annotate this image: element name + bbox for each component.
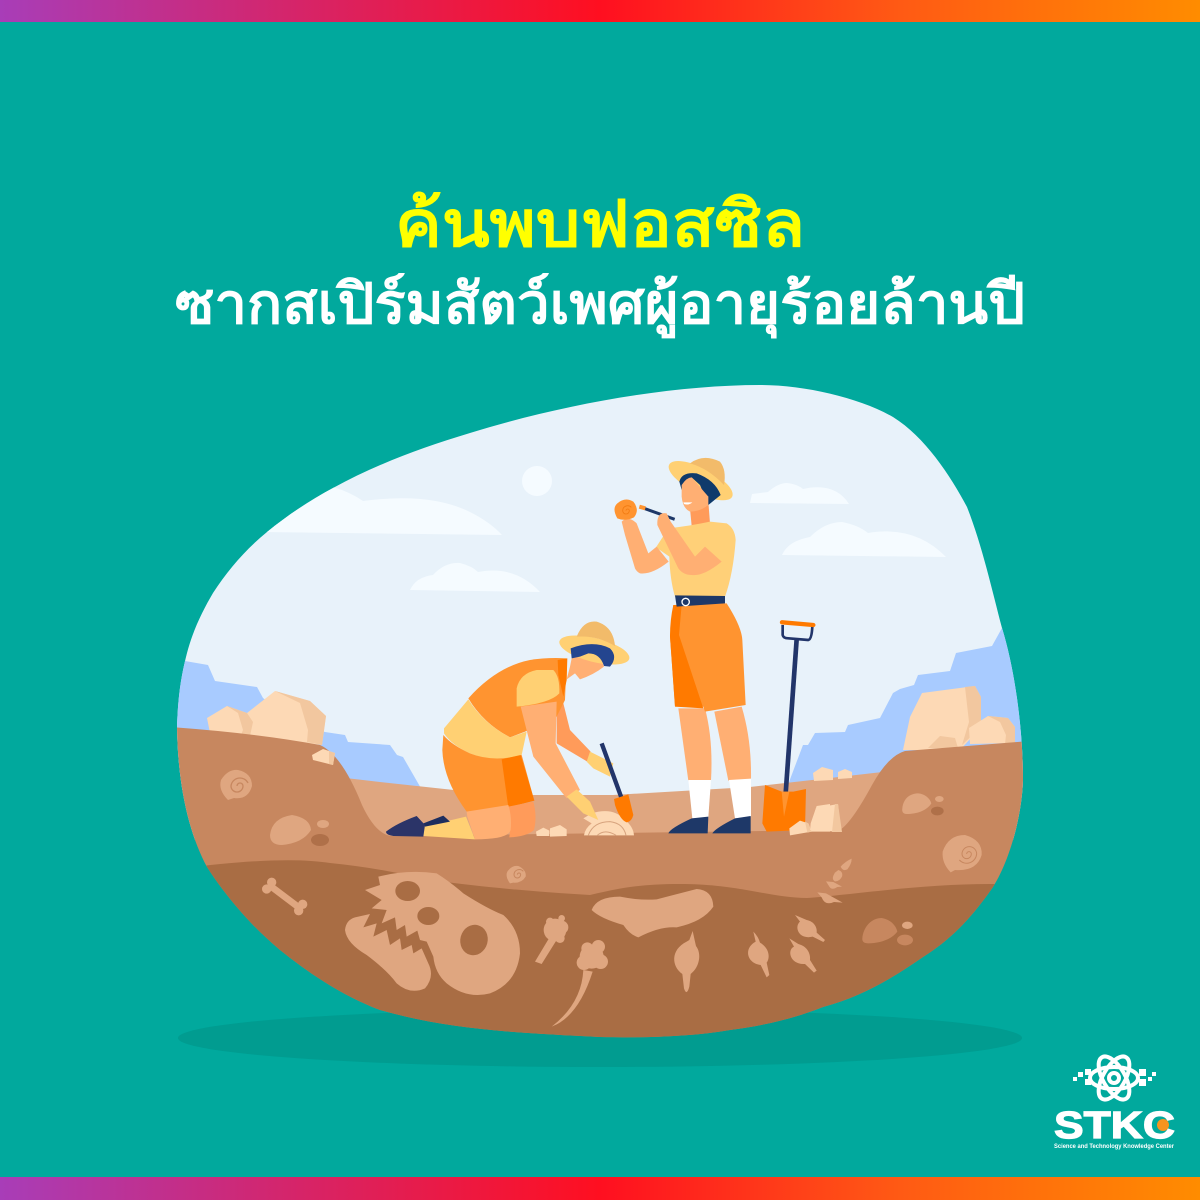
- smile: [683, 502, 692, 505]
- rear soil: [350, 772, 880, 836]
- hair: [571, 644, 614, 667]
- fossil: large bone blob: [592, 889, 713, 937]
- fossil: vertebra stub: [535, 915, 568, 964]
- front glove: [567, 789, 598, 820]
- fossils: right soil: [592, 793, 982, 992]
- thigh: [467, 805, 511, 839]
- back glove: [587, 752, 613, 777]
- front shoe: [386, 816, 425, 837]
- face: [682, 477, 708, 512]
- sky: [170, 380, 1030, 840]
- brush: [639, 507, 675, 519]
- belt buckle: [682, 598, 689, 606]
- illustration: excavation scene: [170, 380, 1030, 1050]
- hair: [679, 473, 721, 505]
- shirt waist: [444, 699, 527, 759]
- neck: [690, 502, 710, 526]
- small pebble left edge: [312, 749, 335, 765]
- ground shadow: [178, 1009, 1022, 1067]
- boots: [668, 817, 708, 833]
- sun: [522, 466, 552, 496]
- lower soil layer: [206, 860, 995, 1038]
- back shoe: [423, 816, 450, 827]
- bottom gradient bar: [0, 1177, 1200, 1200]
- logo tagline: Science and Technology Knowledge Center: [1054, 1144, 1175, 1150]
- hat crown: [577, 622, 615, 646]
- upper soil layer: [170, 727, 1030, 1050]
- fossil: curved tail bone: [552, 940, 608, 1027]
- vest: [468, 658, 567, 737]
- fossil: dinosaur skull upper: [365, 872, 520, 995]
- belt: [675, 595, 725, 607]
- socks: [688, 780, 711, 818]
- stones near shell: [536, 825, 567, 837]
- distant mountains: [170, 628, 1030, 790]
- legs: [678, 708, 712, 781]
- left rocks: [207, 691, 326, 745]
- fossil: small ammonite: [507, 866, 526, 883]
- standing archaeologist: [614, 453, 751, 833]
- fossil in hand: [614, 500, 637, 520]
- face and neck: [567, 653, 604, 679]
- shorts: [442, 735, 534, 812]
- right rocks: [903, 686, 1015, 750]
- logo wordmark: STKC: [1054, 1105, 1175, 1147]
- fossils in upper soil, left: [220, 770, 329, 846]
- pebbles upper: [902, 793, 944, 815]
- skull eye holes: [395, 881, 491, 958]
- fossil: bone: [262, 878, 307, 915]
- logo pixel squares: [1073, 1069, 1156, 1086]
- pebbles lower: [862, 918, 913, 945]
- right arm: [657, 513, 722, 575]
- rocks right of shovel: [810, 767, 852, 832]
- logo: STKC: [1054, 1052, 1175, 1150]
- sleeve: [517, 670, 559, 707]
- shirt: [656, 522, 736, 597]
- yellow sock: [423, 817, 475, 839]
- fossil: vertebrae: [674, 915, 825, 992]
- logo atom icon: [1090, 1052, 1138, 1104]
- title: headline: ค้นพบฟอสซิล: [395, 188, 805, 260]
- title: subtitle: ซากสเปิร์มสัตว์เพศผู้อายุร้อยล้านปี: [175, 272, 1025, 339]
- fossil shell on ground: [583, 811, 634, 835]
- front arm: [521, 702, 580, 798]
- vest strap: [558, 658, 567, 697]
- top gradient bar: [0, 0, 1200, 22]
- fossil: dinosaur skull lower jaw: [345, 914, 431, 991]
- fossil: spine chain: [817, 859, 852, 903]
- large shovel: [762, 622, 813, 832]
- logo orange dot: [1157, 1119, 1169, 1131]
- hat brim: [556, 630, 632, 670]
- left arm: [622, 519, 669, 574]
- fossils: left deep soil: [262, 866, 608, 1027]
- hat brim: [663, 453, 738, 508]
- hat crown: [690, 458, 725, 485]
- shorts: [670, 603, 746, 712]
- back arm: [557, 697, 591, 762]
- clouds: [262, 483, 946, 592]
- rocks by shovel: [789, 804, 830, 835]
- fossil: ammonite: [943, 835, 982, 872]
- crouching archaeologist: [386, 622, 633, 839]
- people and tools: [386, 453, 830, 839]
- calf back: [508, 802, 536, 837]
- small spade: [602, 743, 633, 822]
